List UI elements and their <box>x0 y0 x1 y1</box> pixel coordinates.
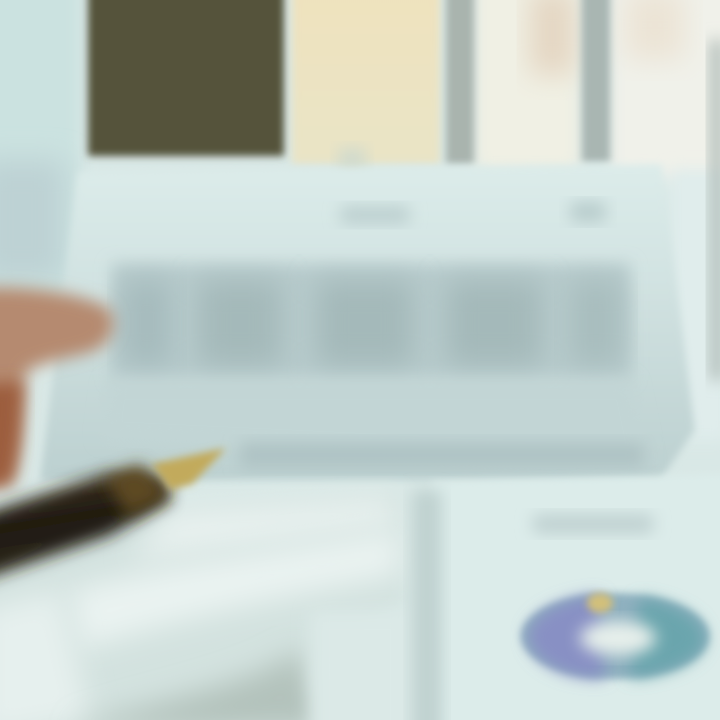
document title mark <box>532 514 654 534</box>
pen collar <box>105 464 170 516</box>
table lower rows <box>100 380 650 468</box>
pen nib <box>152 448 226 490</box>
table header block <box>112 264 630 380</box>
pen <box>0 448 226 580</box>
document header marks <box>340 202 606 224</box>
donut chart <box>521 593 709 679</box>
cream window pane <box>292 0 440 172</box>
second document sheet <box>412 474 720 720</box>
main document sheet <box>40 164 695 480</box>
lower left paper <box>0 492 410 720</box>
finger <box>0 287 114 490</box>
grey window bars <box>446 0 610 164</box>
dark panel in background <box>88 0 284 156</box>
